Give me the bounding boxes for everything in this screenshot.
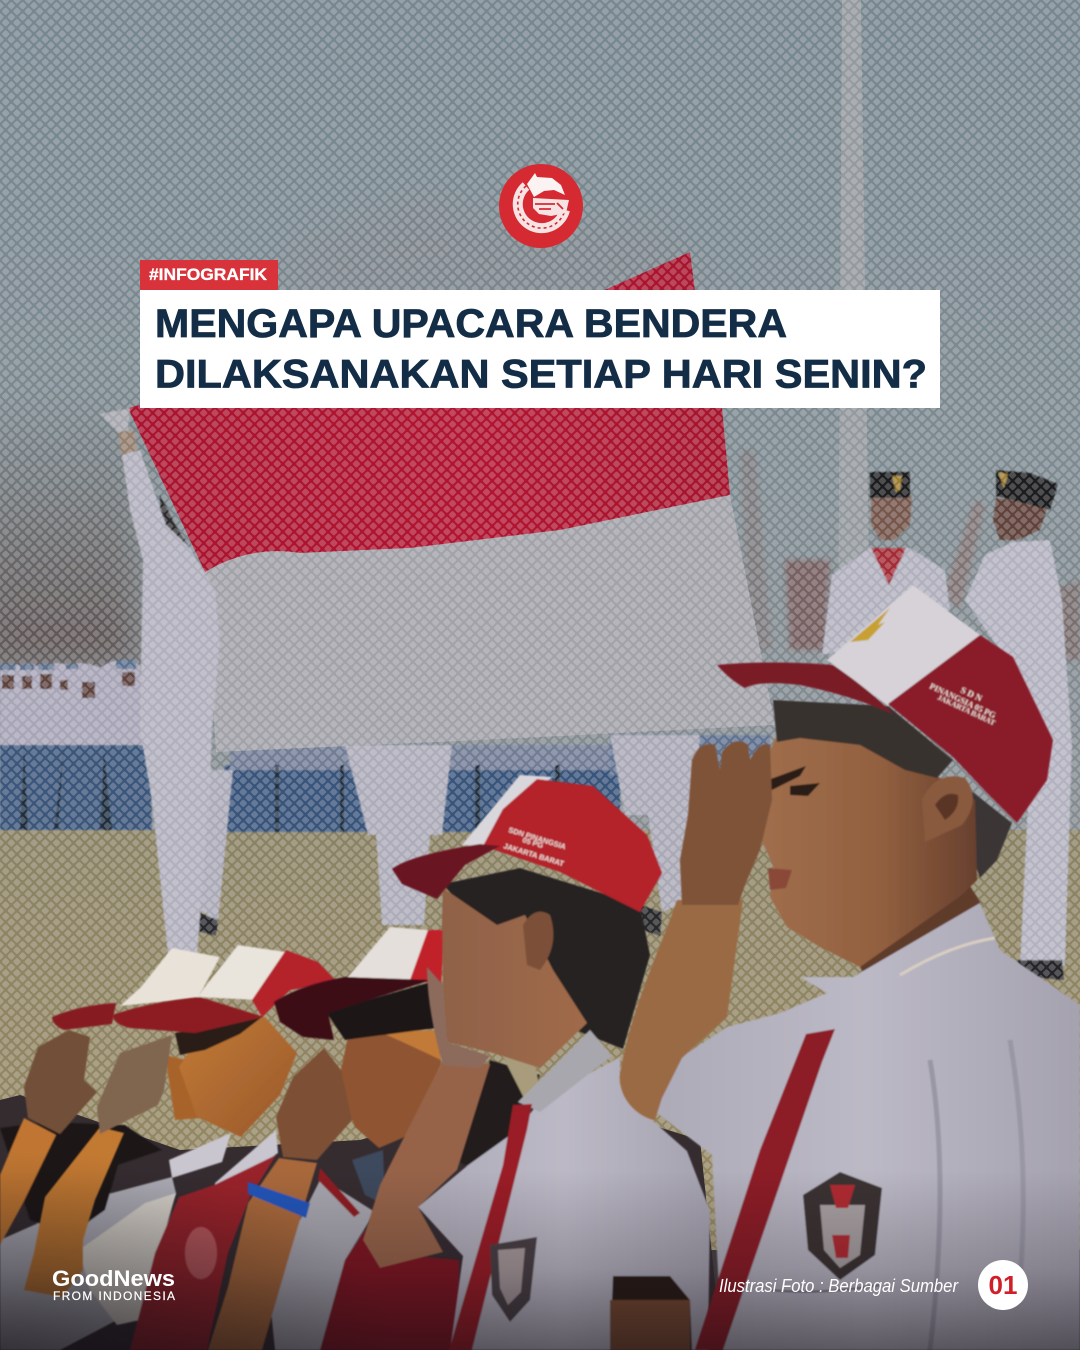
far student: cap brim: [52, 1003, 116, 1030]
second student: vest badge: [185, 1227, 217, 1279]
logo: G bar: [533, 198, 569, 216]
boy: pocket line: [770, 1285, 880, 1292]
brand: GoodNews from Indonesia: [52, 1266, 176, 1303]
girl: collar: [518, 1030, 612, 1112]
second student: collar far: [169, 1133, 231, 1178]
background: reddish structures behind guards: [740, 450, 1080, 660]
page number badge: 01: [989, 1270, 1017, 1300]
girl: face: [442, 888, 587, 1068]
title line 1: MENGAPA UPACARA BENDERA: [155, 302, 787, 346]
bearer: head: [160, 495, 190, 552]
boy: saluting hand: [680, 741, 772, 905]
boy: cap text: S D N: [959, 685, 984, 704]
third student: cap white panel: [348, 927, 428, 980]
third student: distant blue background: [352, 1150, 385, 1205]
student girl: 05 PG: [521, 835, 545, 850]
second student: face: [179, 1017, 297, 1137]
boy: cap brim: [717, 662, 893, 714]
bearer: legs: [197, 770, 233, 922]
third student: blue bracelet: [248, 1182, 310, 1218]
student girl: JAKARTA BARAT: [502, 841, 565, 868]
second student: cap brim: [112, 997, 264, 1033]
crowd: left blue skirts: [0, 745, 152, 830]
honor guard: left: [822, 472, 950, 655]
guard: uniform: [822, 548, 950, 655]
logo: ring pattern: [518, 186, 565, 228]
guard: face: [871, 495, 912, 540]
third student: red strap: [318, 1168, 360, 1217]
third student: cap brim: [274, 977, 431, 1040]
boy: cap red crown: [888, 635, 1053, 823]
girl: cap white panel: [462, 775, 553, 846]
boy: tie: [695, 1029, 835, 1350]
student girl: [363, 775, 710, 1350]
bearer: body: [122, 450, 220, 955]
logo: eagle head: [527, 173, 565, 197]
background: field: [0, 830, 1080, 1250]
brand: GoodNews from Indonesia: GoodNews: [52, 1266, 175, 1291]
left vignette: [0, 1150, 400, 1350]
big student boy: PINANGSIA 05 PG: [928, 681, 998, 720]
boy: shirt folds: [930, 1040, 1023, 1350]
crowd: left white blouses: [0, 661, 150, 745]
far student: dark hat behind: [0, 1122, 162, 1235]
title line 2: DILAKSANAKAN SETIAP HARI SENIN?: [155, 352, 927, 396]
crowd: headscarf caps: [0, 660, 136, 670]
guard: black cap with emblem: [870, 472, 910, 498]
flag bearer: [100, 408, 233, 955]
title panel: [140, 290, 940, 408]
boy: face: [760, 730, 977, 967]
bearer: wrist: [118, 430, 138, 456]
girl: ear: [523, 912, 553, 970]
girl: school badge: [490, 1237, 537, 1322]
second student: cap white panel: [197, 945, 286, 1000]
crowd: right blue skirts: [225, 765, 620, 832]
boy: shirt: [653, 903, 1080, 1350]
girl: tie: [449, 1104, 532, 1350]
tag: #INFOGRAFIK: [140, 260, 278, 290]
uniformed marchers behind flag: [345, 735, 700, 936]
boy: back hair: [968, 790, 1012, 878]
guard: face: [993, 498, 1048, 540]
foreground dark base, left: [0, 1090, 722, 1350]
girl: arm: [363, 1060, 490, 1268]
girl: hair: [443, 868, 650, 1049]
background: haze and distant shapes: [0, 190, 720, 670]
guard: black cap with emblem: [996, 470, 1058, 510]
national flag: [128, 252, 775, 752]
honor guard: right: [965, 470, 1072, 980]
boy: shirt collar strap: [900, 938, 995, 975]
second student: cream shirt: [79, 1193, 176, 1325]
boy: school badge: [803, 1172, 882, 1280]
guard: uniform: [965, 540, 1072, 965]
far student: arm: [0, 1118, 56, 1245]
far student: hand: [24, 1030, 97, 1134]
big student boy: [620, 585, 1080, 1350]
far student: face: [165, 1055, 200, 1120]
boy: arm: [620, 900, 743, 1120]
girl: cap text: SDN PINANGSIA: [507, 825, 568, 852]
second student: arm: [24, 1127, 124, 1297]
flag: white band: [205, 495, 775, 752]
bearer: shoe: [192, 910, 218, 936]
girl: hand: [427, 967, 490, 1068]
far student: grey shirt: [0, 1177, 176, 1350]
logo: bar cuts: [535, 203, 563, 209]
second student: hair: [175, 1017, 262, 1055]
logo badge: [499, 164, 583, 248]
bearer: glove: [100, 408, 130, 432]
tag: #INFOGRAFIK: #INFOGRAFIK: [149, 266, 267, 284]
crowd: blue behind flag right: [610, 735, 770, 775]
guard: shoe: [1016, 960, 1064, 980]
flagpole: [838, 0, 870, 640]
second student: hand: [97, 1035, 172, 1134]
boy: cap white panel: [827, 585, 980, 706]
girl: cap crown: [483, 779, 662, 912]
boy: eye and brow: [768, 766, 820, 796]
distant student crowd: [0, 660, 770, 832]
bottom vignette: [0, 1170, 1080, 1350]
boy: lips: [768, 868, 792, 890]
third student: arm: [208, 1158, 317, 1350]
far student: cap crown: [120, 948, 220, 1006]
big student boy: JAKARTA BARAT: [936, 693, 997, 727]
boy: ear: [922, 776, 973, 842]
boy: cap gold emblem: [850, 608, 890, 642]
guard: red scarf: [871, 548, 906, 585]
girl: shirt: [418, 1057, 710, 1350]
boy: hair fringe: [773, 700, 953, 778]
second student: collar: [215, 1130, 278, 1196]
third student: face: [338, 1030, 441, 1148]
girl: sleeve opening: [610, 1276, 692, 1350]
boy: neck: [860, 870, 982, 985]
third student: grey shirt: [269, 1178, 375, 1350]
girl: cap brim: [392, 844, 500, 899]
third student: hair: [326, 982, 436, 1040]
third student: red vest: [320, 1230, 459, 1350]
crowd: faces: [2, 672, 135, 698]
student far left: [0, 948, 220, 1350]
third student: cap red panel: [410, 930, 445, 984]
girl: orange collar piece: [497, 1040, 540, 1100]
student third from left: [208, 927, 459, 1350]
brand: GoodNews from Indonesia: FROM INDONESIA: [53, 1289, 175, 1303]
student second from left: [24, 945, 338, 1350]
background: sky: [0, 0, 1080, 840]
page number badge: [978, 1260, 1028, 1310]
girl: hair behind arm: [455, 1060, 540, 1166]
second student: red vest: [130, 1155, 276, 1350]
flag: red band: [128, 252, 730, 572]
third student: hand: [276, 1048, 352, 1160]
logo: G ring: [518, 186, 565, 228]
second student: cap red panel: [252, 950, 338, 1017]
